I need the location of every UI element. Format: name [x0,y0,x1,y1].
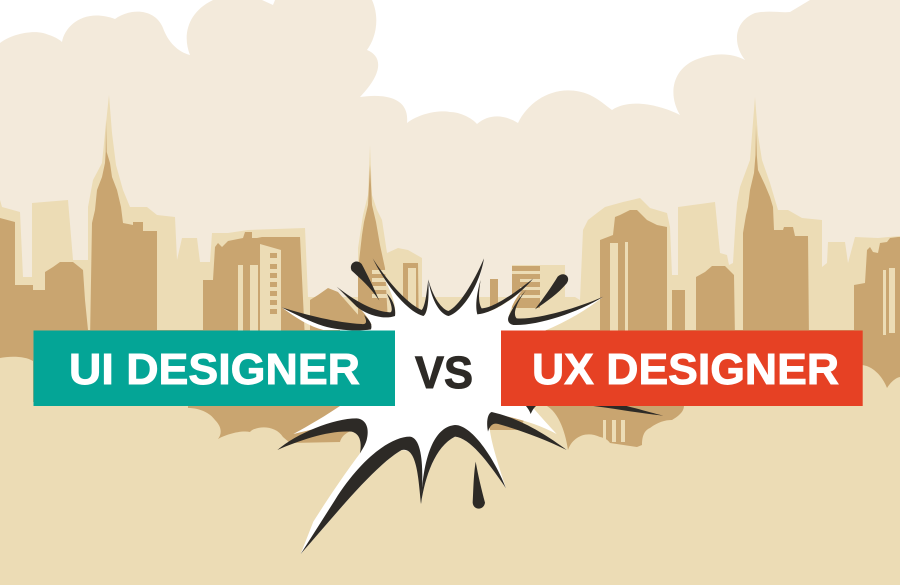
foreground cloud [0,357,900,585]
skyline: dark buildings layer [0,120,900,455]
white centre of burst [395,331,501,406]
building details: windows and light strips [238,242,895,442]
ink droplet top right [535,274,568,309]
VS label: VS [415,347,473,398]
skyline: light buildings layer [0,95,900,340]
background cloud [0,0,900,340]
UX designer banner: UX DESIGNER [532,345,839,394]
UI designer banner: UI DESIGNER [69,345,360,394]
ink droplet top left [351,262,379,301]
UX designer banner [501,330,863,406]
white explosion burst [277,258,663,554]
burst and banners [34,258,863,554]
building windows [270,253,277,314]
burst dark ink strokes [277,258,663,554]
ink droplet bottom [473,462,485,509]
UI designer banner [34,330,395,406]
